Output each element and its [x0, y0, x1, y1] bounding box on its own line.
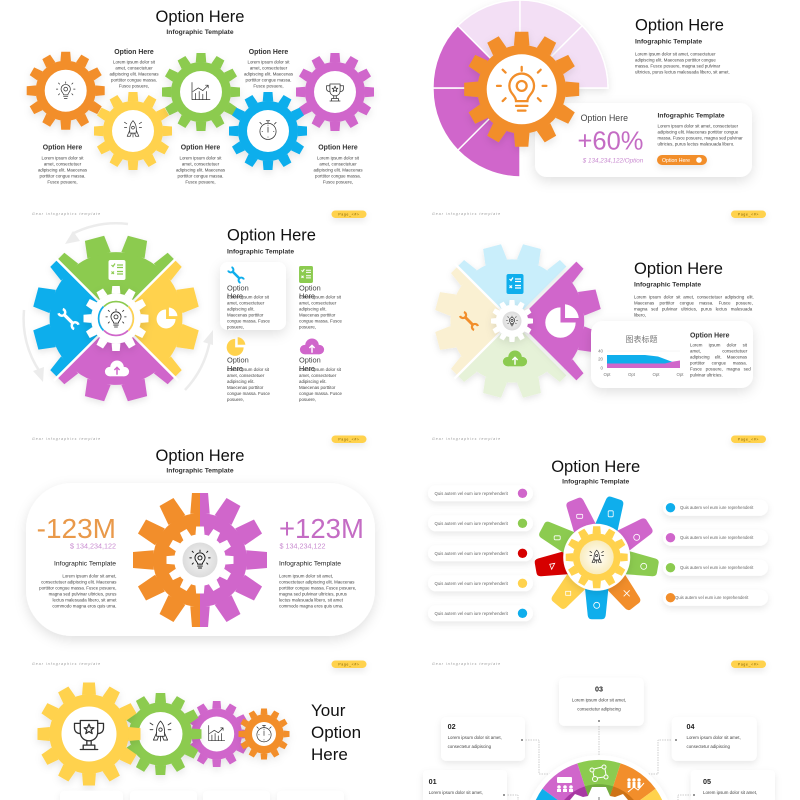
card 02	[441, 717, 525, 761]
subtitle: Infographic Template	[634, 282, 701, 288]
left body text: magna sed pulvinar ultricies, purus	[49, 592, 117, 596]
icon: wrench	[460, 312, 478, 330]
text block: bottom 1: Fusce posuere,	[47, 180, 78, 184]
card 03: Lorem ipsum dolor sit amet,	[572, 698, 626, 702]
item: pie: congue massa. Fusce	[227, 391, 271, 396]
card text: Lorem ipsum dolor sit	[690, 342, 748, 348]
icon: cloud	[503, 351, 527, 366]
body text: libero,	[634, 312, 646, 318]
connectors	[505, 721, 694, 800]
petals	[534, 495, 660, 619]
item: checklist: adipiscing elit.	[299, 306, 327, 312]
card: +60%: $ 134,234,122/Option	[582, 158, 644, 164]
center gear	[166, 526, 234, 594]
right stats	[279, 513, 364, 568]
card: +60%: massa. Fusce posuere, magna sed pulvinar	[658, 136, 743, 140]
panel: pie gear +60%	[433, 0, 752, 177]
left stats: Infographic Template	[54, 560, 116, 568]
title	[311, 701, 361, 764]
header label: Gear infographics template	[432, 212, 501, 216]
gear: orange bulb	[464, 32, 579, 147]
icon: checklist	[506, 274, 524, 294]
pie: pale segments	[458, 0, 608, 88]
item: checklist: Option	[299, 284, 321, 292]
icon: people chart	[627, 778, 644, 792]
center gear	[84, 286, 148, 351]
body text: magna sed pulvinar ultricies, purus lectus malesuada	[634, 306, 753, 312]
right stats: Infographic Template	[279, 560, 341, 568]
text block: bottom 3: Fusce posuere,	[323, 180, 353, 184]
card highlight	[220, 262, 286, 330]
card 01	[423, 770, 507, 800]
text block: top 2: Option Here	[249, 49, 288, 56]
panel: pale gear with purple wedge and chart	[432, 210, 766, 400]
subtitle: Infographic Template	[227, 248, 294, 256]
text block: top 2: amet, consectetuer	[250, 66, 288, 70]
header label: Gear infographics template	[432, 437, 501, 441]
title: Option Here	[227, 226, 316, 244]
body text: Lorem ipsum dolor sit amet, consectetuer adipiscing elit.	[634, 294, 754, 300]
text block: top 1: adipiscing elit. Maecenas	[109, 72, 159, 76]
title: Option Here	[156, 447, 244, 465]
item: checklist	[299, 266, 343, 330]
panel: flower gear with pills	[428, 436, 768, 621]
icon: checklist	[108, 260, 126, 280]
header label: Gear infographics template	[32, 212, 101, 216]
text block: bottom 1: Option Here	[43, 144, 82, 152]
header label: Gear infographics template	[32, 662, 101, 666]
item: cloud: Option	[299, 356, 321, 364]
panel: five gears row	[27, 8, 374, 184]
card: +60%	[535, 103, 752, 177]
text block: top 1: Option Here	[114, 49, 154, 56]
card 03	[559, 678, 644, 726]
card: chart	[591, 321, 753, 388]
text block: bottom 3: porttitor congue massa.	[315, 174, 361, 178]
card 02: consectetur adipiscing	[448, 744, 492, 749]
panel: radial wheel with numbered cards	[423, 660, 775, 800]
right body text: lectus malesuada libero, sit amet	[279, 598, 344, 602]
left body text	[39, 574, 117, 608]
bottom cards	[60, 791, 344, 800]
page pill	[731, 210, 766, 218]
item: wrench: Lorem ipsum dolor sit	[227, 294, 270, 300]
gear wedges	[33, 236, 199, 404]
panel: four-section gear with arrows	[14, 210, 367, 420]
body text	[635, 52, 730, 74]
page pill	[332, 436, 366, 443]
item: pie: posuere,	[227, 397, 244, 402]
left body text: commodo magna eros quis urna.	[52, 604, 116, 608]
item: checklist: Maecenas porttitor	[299, 312, 336, 318]
subtitle: Infographic Template	[562, 478, 630, 486]
body text	[634, 294, 754, 318]
card: +60%: +60%	[578, 128, 643, 156]
subtitle: Infographic Template	[635, 38, 702, 46]
text block: bottom 1: Lorem ipsum dolor sit	[42, 156, 84, 160]
title: Option Here	[156, 8, 244, 26]
card 01: 01	[429, 777, 437, 786]
card 03: 03	[595, 684, 603, 694]
right pill list: Quis autem vel eum iure reprehenderit	[680, 505, 754, 510]
item: cloud	[299, 339, 343, 402]
item: pie: Lorem ipsum dolor sit	[227, 367, 270, 372]
right body text: commodo magna eros quis urna.	[279, 604, 343, 608]
text block: bottom 1: amet, consectetuer	[44, 162, 82, 166]
item: pie: amet, consectetuer	[227, 373, 265, 378]
text block: top 1: porttitor congue massa.	[111, 78, 157, 82]
area chart: Opt	[603, 372, 611, 377]
card 05: Lorem ipsum dolor sit amet,	[703, 790, 757, 795]
title: Your	[311, 701, 346, 720]
icon: network	[590, 765, 608, 782]
item: pie: Here	[227, 364, 243, 373]
area chart: Opt	[676, 372, 684, 377]
left body text: lectus malesuada libero, sit amet	[53, 598, 117, 602]
right pill list: Quis autem vel eum iure reprehenderit	[680, 535, 754, 540]
item: checklist: congue massa. Fusce	[299, 318, 343, 324]
text block: bottom 1	[38, 144, 88, 184]
item: cloud: amet, consectetuer	[299, 373, 337, 378]
card: +60%: Lorem ipsum dolor sit amet, consectetuer	[658, 124, 739, 128]
left pill list	[428, 485, 533, 621]
page pill	[731, 436, 766, 443]
text block: top 2: adipiscing elit. Maecenas	[244, 72, 294, 76]
right pill list: Quis autem vel eum iure reprehenderit	[675, 595, 749, 600]
area chart	[598, 348, 684, 377]
page pill: Page_<#>	[338, 662, 360, 666]
subtitle: Infographic Template	[166, 29, 234, 36]
text block: bottom 3	[313, 144, 363, 184]
card 04: Lorem ipsum dolor sit amet,	[686, 735, 741, 740]
card 05: 05	[703, 777, 711, 786]
split gear	[133, 493, 267, 627]
card 01: Lorem ipsum dolor sit amet,	[429, 790, 483, 795]
left pill list: Quis autem vel eum iure reprehenderit	[434, 611, 509, 616]
area chart: 0	[601, 366, 604, 370]
item: wrench: congue massa. Fusce	[227, 318, 271, 324]
header label: Gear infographics template	[32, 437, 101, 441]
item: cloud: Maecenas porttitor	[299, 385, 336, 390]
big rounded card	[26, 483, 375, 636]
page pill: Page_<#>	[338, 438, 360, 442]
text block: top 1	[109, 49, 159, 88]
card text: adipiscing elit. Maecenas	[690, 354, 748, 360]
connector dots	[503, 720, 695, 796]
panel: split gear -123M +123M	[26, 436, 375, 636]
button	[657, 155, 707, 165]
left pill list: Quis autem vel eum iure reprehenderit	[434, 581, 509, 586]
card: +60%: Infographic Template	[658, 112, 725, 120]
item: cloud: congue massa. Fusce	[299, 391, 343, 396]
subtitle: Infographic Template	[166, 468, 234, 474]
item: checklist: amet, consectetuer	[299, 300, 337, 306]
area chart: 20	[598, 356, 604, 362]
item: wrench: Option	[227, 284, 249, 292]
body text: Lorem ipsum dolor sit amet, consectetuer	[635, 52, 716, 56]
text block: bottom 3: Lorem ipsum dolor sit	[317, 156, 360, 160]
text block: bottom 2: amet, consectetuer	[182, 162, 220, 166]
item: wrench	[227, 267, 271, 330]
button: Option Here	[662, 158, 690, 164]
body text: Maecenas porttitor congue massa. Fusce posuere,	[634, 300, 753, 306]
wheel	[530, 755, 668, 800]
text block: top 1: Fusce posuere,	[119, 84, 149, 88]
item: checklist: Here	[299, 292, 315, 300]
page pill: Page_<#>	[738, 662, 759, 666]
gear: purple trophy	[296, 53, 374, 131]
card 02: 02	[448, 722, 456, 731]
card text: porttitor congue massa.	[690, 360, 747, 366]
gear: yellow rocket	[94, 92, 172, 170]
left body text: Lorem ipsum dolor sit amet,	[62, 574, 116, 578]
card text: Option Here	[690, 332, 730, 340]
right pill list	[663, 500, 768, 606]
title: Option	[311, 723, 361, 742]
left stats: -123M	[37, 513, 116, 544]
card text: pulvinar ultricies.	[690, 372, 723, 378]
icon: wrench	[59, 309, 78, 329]
right stats: $ 134,234,122	[280, 542, 325, 550]
item: cloud: adipiscing elit.	[299, 379, 327, 384]
text block: bottom 3: Option Here	[318, 144, 358, 152]
page pill	[332, 660, 366, 668]
card 05	[691, 770, 775, 800]
left body text: porttitor congue massa. Fusce posuere,	[39, 586, 116, 590]
text block: bottom 2	[176, 144, 226, 184]
card 04: 04	[686, 722, 694, 731]
gear: green rocket	[120, 693, 202, 775]
card 04	[672, 717, 757, 761]
header label: Gear infographics template	[432, 662, 501, 666]
pie: purple segments	[433, 26, 520, 177]
panel: four descending gears	[32, 660, 366, 800]
card text	[690, 332, 751, 378]
icon: cloud	[105, 361, 129, 376]
area chart: 40	[598, 348, 604, 354]
item: cloud: Lorem ipsum dolor sit	[299, 367, 342, 372]
area chart: Opt	[652, 372, 660, 377]
text block: bottom 2: Option Here	[181, 144, 220, 152]
gear: orange bulb	[27, 52, 105, 130]
left pill list: Quis autem vel eum iure reprehenderit	[434, 491, 509, 496]
item: checklist: Lorem ipsum dolor sit	[299, 294, 342, 300]
card: +60%: adipiscing elit. Maecenas porttitor congue	[658, 130, 739, 134]
item: cloud: posuere,	[299, 397, 316, 402]
left pill list: Quis autem vel eum iure reprehenderit	[434, 551, 509, 556]
text block: bottom 1: porttitor congue massa.	[40, 174, 85, 178]
left body text: consectetuer adipiscing elit. Maecenas	[41, 580, 117, 584]
card 03: consectetur adipiscing	[577, 706, 621, 712]
title: Option Here	[634, 260, 723, 278]
right body text: Lorem ipsum dolor sit amet,	[279, 574, 333, 578]
card text: amet, consectetuer	[690, 348, 748, 354]
text block: top 2: Fusce posuere,	[253, 84, 284, 88]
text block: top 2: porttitor congue massa.	[246, 78, 291, 82]
item: pie: adipiscing elit.	[227, 379, 255, 384]
item: checklist: posuere,	[299, 324, 316, 330]
text block: bottom 2: adipiscing elit. Maecenas	[176, 168, 226, 172]
right body text: consectetuer adipiscing elit. Maecenas	[279, 580, 355, 584]
item: pie	[227, 337, 271, 402]
item: wrench: posuere,	[227, 324, 244, 330]
text block: bottom 2: Fusce posuere,	[185, 180, 216, 184]
right pill list: Quis autem vel eum iure reprehenderit	[680, 565, 754, 570]
item: pie: Option	[227, 356, 249, 364]
text block: bottom 3: adipiscing elit. Maecenas	[313, 168, 363, 172]
right stats: +123M	[279, 513, 364, 544]
item: cloud: Here	[299, 364, 315, 373]
gear: yellow trophy	[38, 682, 140, 786]
title: Here	[311, 745, 348, 764]
text block: bottom 3: amet, consectetuer	[319, 162, 357, 166]
page pill	[332, 210, 366, 218]
gear: green chart	[162, 53, 240, 131]
text block: top 1: amet, consectetuer	[115, 66, 153, 70]
card text: Fusce posuere, magna sed	[690, 366, 751, 372]
left stats	[37, 513, 116, 568]
card 02: Lorem ipsum dolor sit amet,	[448, 735, 502, 740]
body text: massa. Fusce posuere, magna sed pulvinar	[635, 64, 721, 68]
icon: pie	[157, 308, 177, 328]
item: pie: Maecenas porttitor	[227, 385, 264, 390]
body text: adipiscing elit. Maecenas porttitor congue	[635, 58, 716, 62]
title: Option Here	[551, 458, 640, 476]
purple wedge	[524, 262, 601, 382]
right body text	[279, 574, 356, 608]
right body text: porttitor congue massa. Fusce posuere,	[279, 586, 356, 590]
gear: purple chart	[184, 701, 250, 767]
item: wrench: amet, consectetuer	[227, 300, 265, 306]
center gear	[491, 300, 533, 342]
card 04: consectetur adipiscing	[686, 744, 731, 749]
item: wrench: Maecenas porttitor	[227, 312, 264, 318]
icon: pie	[545, 304, 579, 338]
item: wrench: Here	[227, 292, 243, 300]
page pill: Page_<#>	[738, 438, 759, 442]
text block: bottom 2: Lorem ipsum dolor sit	[180, 156, 222, 160]
left stats: $ 134,234,122	[70, 542, 116, 550]
card: +60%: ultricies, purus lectus malesuada libero.	[658, 142, 734, 146]
page pill: Page_<#>	[738, 212, 759, 216]
center gear	[563, 524, 630, 591]
text block: top 2: Lorem ipsum dolor sit	[248, 60, 290, 64]
text block: bottom 1: adipiscing elit. Maecenas	[38, 168, 88, 172]
text block: bottom 2: porttitor congue massa.	[178, 174, 223, 178]
card: +60%: Option Here	[581, 113, 628, 123]
right body text: magna sed pulvinar ultricies, purus	[279, 592, 348, 596]
text block: top 1: Lorem ipsum dolor sit	[113, 60, 156, 64]
body text: ultricies, purus lectus malesuada libero, sit amet.	[635, 70, 730, 74]
area chart: Opt	[628, 372, 636, 377]
page pill	[731, 660, 766, 668]
chart title: 图表标题	[626, 334, 658, 344]
text block: top 2	[244, 49, 294, 88]
title: Option Here	[635, 16, 724, 34]
icon: presentation	[557, 777, 573, 792]
left pill list: Quis autem vel eum iure reprehenderit	[434, 521, 509, 526]
page pill: Page_<#>	[338, 212, 360, 216]
cycle arrows	[24, 223, 213, 390]
pale wedges	[435, 244, 566, 400]
gear: orange stopwatch	[238, 708, 290, 760]
gear: blue stopwatch	[229, 92, 307, 170]
item: wrench: adipiscing elit.	[227, 306, 255, 312]
